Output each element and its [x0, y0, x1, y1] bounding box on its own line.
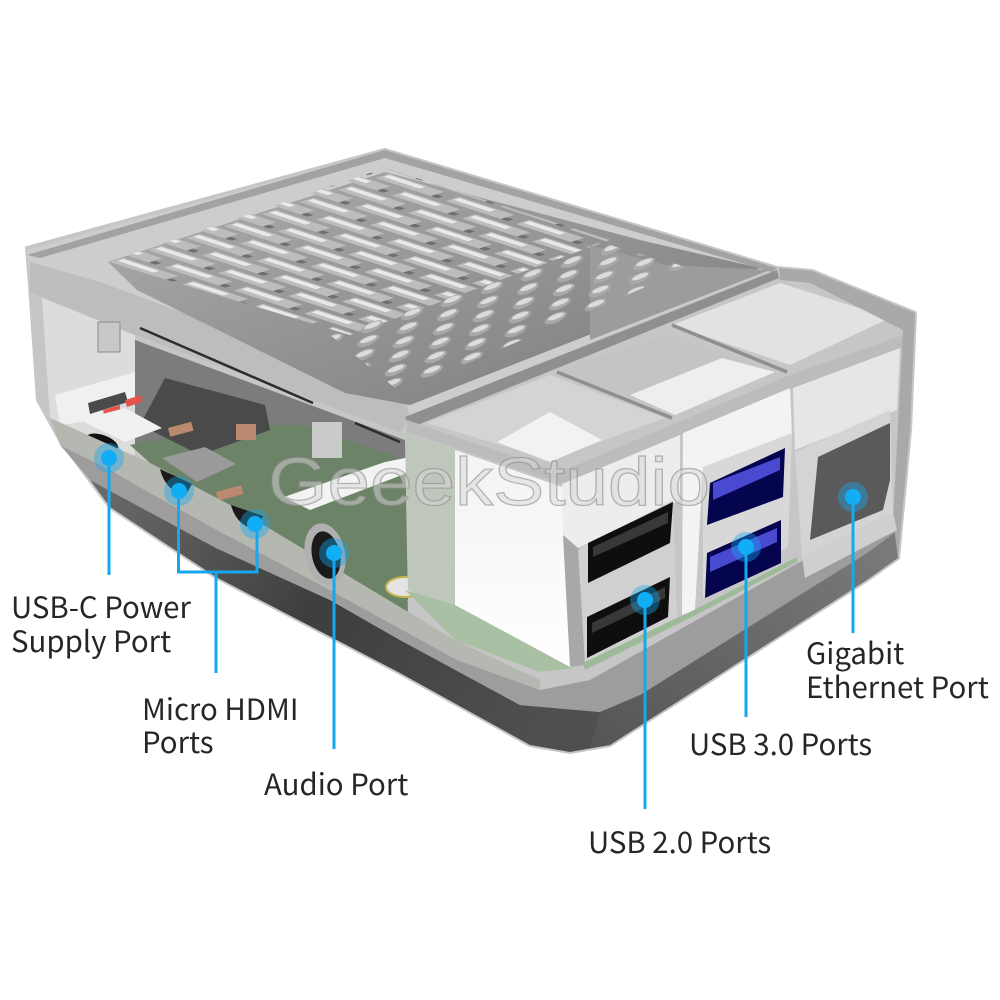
micro hdmi opening 1: [160, 469, 192, 496]
usb 2.0 upper socket: [588, 502, 673, 583]
circuit board: [130, 425, 408, 620]
clear base under ethernet: [802, 513, 897, 578]
callout: USB 2.0: [588, 585, 771, 862]
front top bar: [407, 335, 903, 484]
case body silhouette: [27, 150, 915, 752]
usb-c opening: [83, 430, 121, 456]
callout: Gigabit Ethernet: [806, 482, 989, 707]
silver hdmi shell: [162, 447, 236, 482]
callout: Micro HDMI: [142, 476, 299, 762]
usb-c metal shell: [80, 408, 162, 442]
orange components: [168, 422, 256, 501]
label: USB-C: USB-C Power: [11, 585, 191, 627]
green board edge: [583, 557, 797, 670]
board visible under block: [405, 590, 575, 672]
far corner vent plate: [590, 245, 770, 340]
rear right rim: [779, 268, 915, 558]
translucent base band: [60, 445, 898, 712]
usb port bay tops: [427, 283, 890, 462]
usb 2.0 lower socket: [587, 577, 670, 658]
ethernet housing: [795, 410, 893, 557]
hdmi port on far side: [88, 392, 128, 414]
bay divider strips: [557, 325, 787, 418]
usb 3.0 upper socket: [707, 448, 785, 525]
label: Gigabit Ethernet: Ethernet Port: [806, 665, 989, 707]
product: transparent case: [27, 150, 915, 752]
micro hdmi opening 2: [231, 505, 263, 530]
usb 3.0 lower socket: [705, 520, 781, 598]
usb 3.0 housing: [703, 433, 792, 598]
white connector block at far left: [55, 362, 175, 425]
watermark: GeeekStudio: [268, 444, 710, 520]
label: Micro HDMI: Ports: [142, 720, 214, 762]
usb 2.0 housing: [578, 500, 677, 663]
clear left column of block: [405, 432, 455, 610]
ventilation slots: [108, 168, 610, 335]
red connector tabs: [103, 395, 142, 417]
lid interior background: [108, 172, 760, 405]
callout: USB 3.0: [689, 532, 872, 764]
lid rim: [27, 150, 777, 272]
label: Micro HDMI: Micro HDMI: [142, 687, 299, 729]
audio jack: [299, 520, 351, 588]
label: USB-C: Supply Port: [11, 619, 171, 661]
ethernet upper wall: [793, 348, 900, 450]
label: Gigabit Ethernet: Gigabit: [806, 631, 904, 673]
white audio cable strip: [284, 455, 430, 510]
lid top: [27, 150, 777, 420]
label: Audio: Audio Port: [264, 762, 408, 804]
callout: Audio: [264, 538, 408, 804]
dark chip overlay: [140, 378, 270, 455]
ethernet socket: [810, 423, 890, 540]
left wall interior: [42, 298, 135, 455]
ventilation pegs: [330, 245, 690, 392]
upper wall white: [562, 435, 680, 548]
label: USB 2.0: USB 2.0 Ports: [588, 820, 771, 862]
clear front lip: [50, 418, 540, 690]
white block behind usb ports: [455, 450, 572, 668]
black shelf lines under lid: [140, 328, 400, 442]
lid clip left: [98, 322, 120, 352]
dark base right side: [590, 530, 898, 748]
silver screw on board: [386, 577, 424, 597]
lid clip centre: [312, 422, 342, 458]
label: USB 3.0: USB 3.0 Ports: [689, 722, 872, 764]
usb 2.0 outer strip: [563, 528, 585, 667]
grey interior behind board: [135, 340, 408, 600]
lid front lip: [30, 262, 410, 432]
callout: USB-C power: [11, 443, 191, 661]
dark base left side: [90, 480, 640, 752]
lid front bar: [405, 270, 779, 428]
